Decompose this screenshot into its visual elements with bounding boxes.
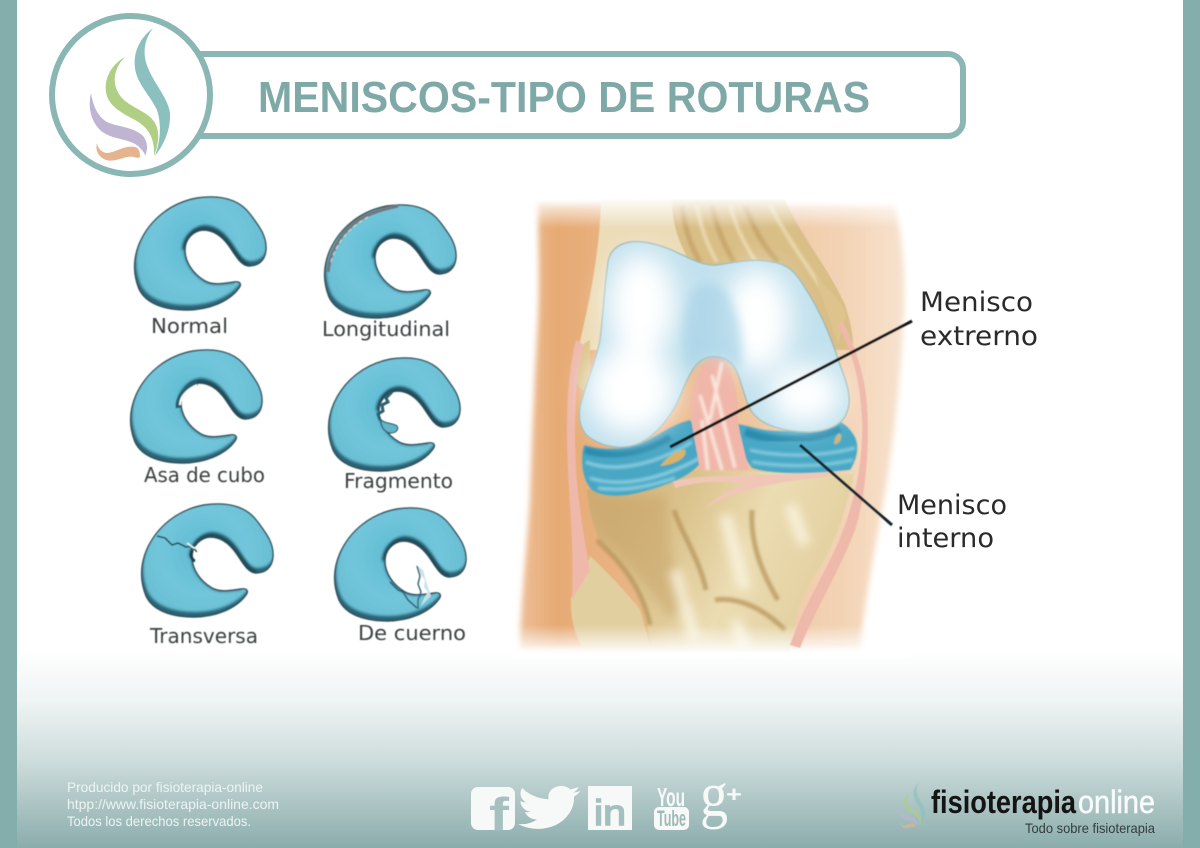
footer credits: [67, 779, 279, 829]
knee anatomy illustration: [510, 194, 915, 657]
femur highlights: [588, 253, 841, 434]
footer credits: htpp://www.fisioterapia-online.com: [67, 796, 279, 812]
meniscus diagram: transverse tear: [142, 499, 275, 648]
logo badge circle: [52, 16, 210, 174]
meniscus diagram: normal: [135, 192, 268, 338]
top fade: [520, 194, 915, 228]
medial fat pad: [815, 275, 846, 345]
meniscus diagram: bucket handle tear: Asa de cubo: [144, 463, 265, 487]
icon: linkedin: [588, 786, 632, 833]
fragment piece: [381, 420, 398, 433]
meniscus diagram: longitudinal tear: Longitudinal: [322, 317, 450, 341]
icon: small flame: [899, 782, 925, 828]
footer brand logo: [899, 782, 1155, 836]
icon: facebook: f: [489, 788, 510, 840]
fibula side: [571, 556, 652, 652]
icon: facebook: [471, 787, 515, 840]
left meniscus: [582, 420, 703, 496]
title banner frame: [160, 54, 963, 136]
icon: youtube: [654, 782, 689, 831]
left border strip: [0, 0, 17, 848]
meniscus diagram: bucket handle tear: [131, 345, 265, 487]
bottom fade: [510, 625, 910, 657]
cruciate ligaments: [690, 355, 748, 470]
meniscus diagram: horn tear: [335, 503, 468, 645]
meniscal ligament band: [673, 470, 850, 508]
pointer line: menisco externo: [670, 321, 912, 447]
callout: menisco interno: [897, 490, 1007, 554]
femur: [579, 242, 849, 447]
icon: twitter bird: [518, 786, 580, 829]
callout: menisco interno: interno: [897, 523, 994, 554]
meniscus diagram: transverse tear: Transversa: [149, 624, 258, 648]
callout: menisco externo: Menisco: [920, 287, 1033, 318]
icon: youtube: Tube: [657, 806, 686, 831]
icon: youtube: You: [657, 782, 685, 812]
lateral fat pad: [574, 340, 590, 390]
icon: google plus: g: [700, 760, 728, 830]
tibia dark area: [592, 495, 690, 620]
title: MENISCOS-TIPO DE ROTURAS: [258, 73, 870, 122]
thigh tendons: [578, 200, 853, 350]
footer credits: Producido por fisioterapia-online: [67, 779, 263, 795]
icon: linkedin: in: [594, 792, 626, 833]
bottom gradient background: [0, 650, 1200, 848]
meniscus diagram: normal: Normal: [151, 314, 228, 338]
tibia: [587, 470, 854, 652]
callout: menisco externo: extrerno: [920, 321, 1038, 352]
meniscus diagram: fragment tear: [329, 353, 462, 493]
brand wordmark: fisioterapia: [931, 784, 1076, 820]
footer credits: Todos los derechos reservados.: [67, 813, 251, 829]
right border strip: [1183, 0, 1200, 848]
tibia highlights: [675, 505, 805, 650]
callout: menisco interno: Menisco: [897, 490, 1007, 521]
femur lower blue notch shading: [683, 284, 742, 372]
callout: menisco externo: [920, 287, 1038, 352]
right meniscus: [738, 420, 857, 473]
meniscus diagram: horn tear: De cuerno: [358, 621, 466, 645]
pointer line: menisco interno: [800, 445, 892, 525]
yellow tear mark: [660, 450, 686, 466]
icon: flame logo: [90, 28, 170, 161]
tendon streaks: [682, 205, 778, 262]
meniscus diagram: fragment tear: Fragmento: [344, 469, 453, 493]
brand tagline: Todo sobre fisioterapia: [1025, 820, 1155, 836]
left collateral ligament: [567, 340, 590, 600]
yellow mark: [834, 434, 841, 444]
icon: google plus: +: [726, 782, 742, 807]
right collateral ligament: [790, 320, 868, 648]
meniscus diagram: longitudinal tear: [322, 200, 458, 341]
skin and soft tissue background: [520, 202, 905, 650]
brand wordmark suffix: online: [1078, 784, 1155, 820]
social icons: [471, 760, 742, 840]
tibia shading: [597, 510, 785, 630]
